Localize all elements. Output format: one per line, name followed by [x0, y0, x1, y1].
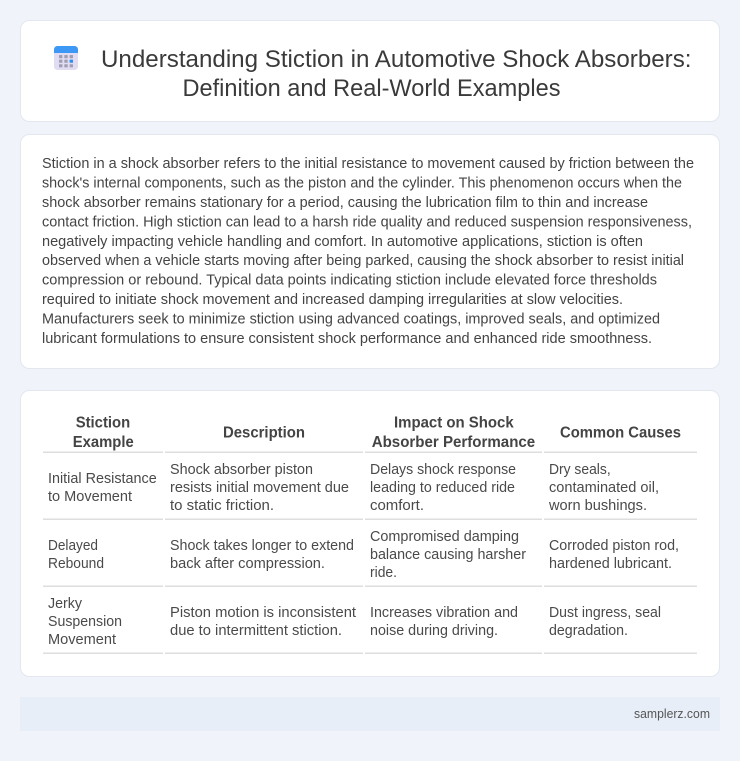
table header row: Description — [223, 424, 305, 442]
text block: definition paragraph: shock absorber remains stationary for a period, causing the lubrication film to thin and increase — [42, 195, 648, 211]
text block: definition paragraph: observed when a vehicle starts moving after being parked, causing the shock absorber to resist initial — [42, 253, 684, 269]
table row: jerky suspension movement: due to intermittent stiction. — [170, 623, 342, 639]
table header row: Common Causes — [560, 424, 681, 442]
table row: initial resistance to movement: Shock absorber piston — [170, 462, 313, 478]
table header row: Impact on Shock — [394, 414, 514, 432]
table row: delayed rebound: Delayed — [48, 538, 98, 554]
text block: definition paragraph: lubricant formulations to ensure consistent shock performance and enhanced ride smoothness. — [42, 331, 652, 347]
text block: definition paragraph: shock's internal components, such as the piston and the cylinder. This phenomenon occurs when the — [42, 175, 682, 191]
table row: delayed rebound — [48, 529, 679, 581]
table row: initial resistance to movement: resists initial movement due — [170, 480, 349, 496]
table row: initial resistance to movement: Initial Resistance — [48, 471, 157, 487]
table row: initial resistance to movement: to static friction. — [170, 498, 274, 514]
table row: delayed rebound: back after compression. — [170, 556, 325, 572]
table row: jerky suspension movement: Jerky — [48, 596, 83, 612]
table row: initial resistance to movement: Dry seals, — [549, 462, 611, 478]
table row: jerky suspension movement: Suspension — [48, 614, 122, 630]
table row: delayed rebound: Shock takes longer to extend — [170, 538, 354, 554]
title: Definition and Real-World Examples — [182, 75, 560, 102]
table header row: Stiction — [76, 414, 130, 432]
title — [101, 46, 692, 102]
table row: initial resistance to movement: to Movement — [48, 489, 132, 505]
table row: initial resistance to movement: contaminated oil, — [549, 480, 659, 496]
panel: title card — [20, 20, 720, 122]
table header row — [73, 414, 681, 451]
table row: delayed rebound: Corroded piston rod, — [549, 538, 679, 554]
table row: jerky suspension movement: Increases vibration and — [370, 605, 518, 621]
table row: jerky suspension movement: Piston motion is inconsistent — [170, 605, 356, 621]
table row: jerky suspension movement: noise during driving. — [370, 623, 498, 639]
text block: definition paragraph — [42, 156, 694, 347]
table row: jerky suspension movement: Dust ingress, seal — [549, 605, 661, 621]
table row: initial resistance to movement: leading to reduced ride — [370, 480, 515, 496]
table row: initial resistance to movement: Delays shock response — [370, 462, 516, 478]
text block: definition paragraph: contact friction. High stiction can lead to a harsh ride quality and reduced suspension responsiveness, — [42, 214, 692, 230]
table header row: Example — [73, 434, 134, 451]
text block: definition paragraph: required to initiate shock movement and increased damping irregularities at slow velocities. — [42, 292, 623, 308]
table row: initial resistance to movement — [48, 462, 659, 514]
panel: definition text — [20, 134, 720, 368]
table row: delayed rebound: Rebound — [48, 556, 104, 572]
table row: delayed rebound: Compromised damping — [370, 529, 519, 545]
text block: definition paragraph: compression or rebound. Typical data points indicating stiction include elevated force thresholds — [42, 273, 657, 289]
table row: jerky suspension movement: degradation. — [549, 623, 628, 639]
title: Understanding Stiction in Automotive Shock Absorbers: — [101, 46, 692, 73]
text block: definition paragraph: Manufacturers seek to minimize stiction using advanced coatings, improved seals, and optimized — [42, 312, 660, 328]
icon: calendar — [54, 46, 78, 70]
table row: delayed rebound: balance causing harsher — [370, 547, 526, 563]
panel: stiction examples table — [20, 390, 720, 676]
text block: definition paragraph: Stiction in a shock absorber refers to the initial resistance to movement caused by friction between the — [42, 156, 694, 172]
table row: delayed rebound: hardened lubricant. — [549, 556, 672, 572]
footer bar — [20, 697, 720, 731]
table row: initial resistance to movement: comfort. — [370, 498, 424, 514]
table row: initial resistance to movement: worn bushings. — [548, 498, 647, 514]
table row: delayed rebound: ride. — [370, 565, 397, 581]
text block: definition paragraph: negatively impacting vehicle handling and comfort. In automotive applications, stiction is often — [42, 234, 643, 250]
table row: jerky suspension movement: Movement — [48, 632, 116, 648]
footer source text: samplerz.com — [634, 706, 710, 721]
table header row: Absorber Performance — [372, 434, 535, 451]
table row: jerky suspension movement — [48, 596, 661, 648]
